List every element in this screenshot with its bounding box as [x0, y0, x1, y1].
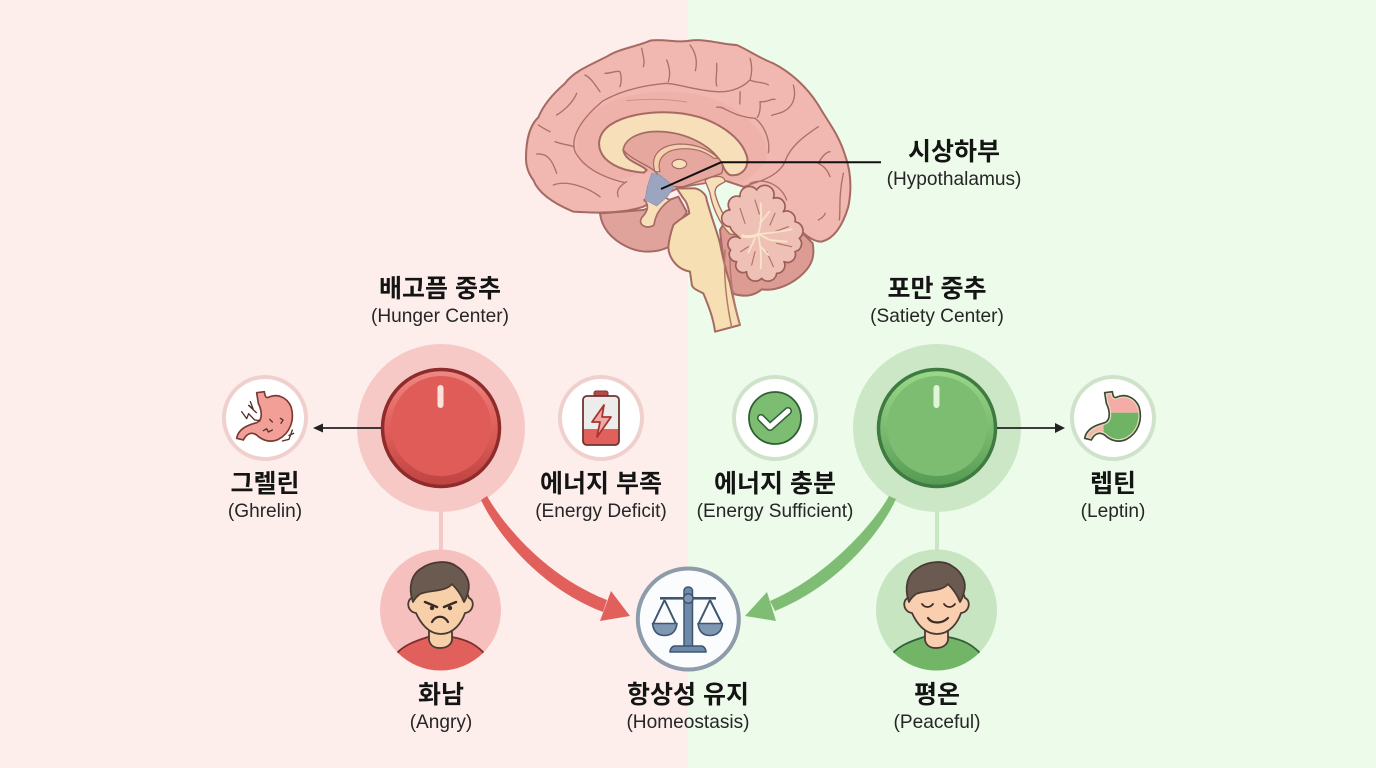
label: peaceful: 평온 — [914, 681, 960, 709]
avatar: peaceful — [876, 550, 997, 680]
background: hunger side — [0, 0, 688, 768]
brainstem — [668, 188, 740, 332]
label: energy deficit — [535, 470, 667, 522]
cerebrum — [526, 40, 851, 242]
label: energy deficit: (Energy Deficit) — [535, 501, 667, 522]
knob body — [382, 370, 500, 486]
label: ghrelin — [228, 470, 302, 522]
halo — [853, 344, 1021, 512]
temporal lobe — [600, 197, 687, 252]
arbor vitae — [743, 234, 758, 237]
heading: satiety center — [870, 275, 1004, 327]
heading: hunger center — [371, 275, 509, 327]
label: homeostasis: 항상성 유지 — [627, 681, 749, 709]
label: energy sufficient — [697, 470, 853, 522]
heading: satiety center: 포만 중추 — [888, 275, 986, 303]
fornix — [654, 144, 718, 172]
sulci — [537, 45, 843, 220]
label: leptin — [1081, 470, 1145, 522]
arrow: satiety to leptin — [997, 423, 1065, 433]
hypothalamus — [645, 173, 674, 206]
heading: hunger center: 배고픔 중추 — [379, 275, 501, 303]
knob face — [887, 376, 987, 476]
halo — [357, 344, 525, 512]
icon: homeostasis balance scale — [638, 568, 739, 670]
label: homeostasis: (Homeostasis) — [626, 712, 750, 733]
knob indicator — [438, 385, 444, 408]
icon: low battery — [560, 377, 642, 459]
heading: satiety center: (Satiety Center) — [870, 306, 1004, 327]
arrow: hunger to ghrelin — [313, 424, 381, 432]
avatar: angry — [380, 550, 501, 680]
pituitary stalk — [641, 193, 670, 227]
curved arrow: hunger to homeostasis — [481, 496, 630, 621]
label: ghrelin: 그렐린 — [230, 470, 300, 498]
label: peaceful: (Peaceful) — [893, 712, 981, 733]
label: ghrelin: (Ghrelin) — [228, 501, 302, 522]
faint gyrus line — [627, 99, 687, 102]
cerebellar folds — [740, 200, 792, 267]
fourth ventricle band — [705, 176, 743, 236]
knob indicator — [934, 385, 940, 408]
icon: energy check — [734, 377, 816, 459]
satiety dial — [853, 344, 1021, 512]
icon: leptin stomach — [1072, 377, 1154, 459]
connector: satiety to peaceful — [935, 505, 939, 555]
knob body — [878, 370, 996, 486]
icon: ghrelin stomach — [224, 377, 306, 459]
corpus callosum — [599, 112, 747, 175]
hunger dial — [357, 344, 525, 512]
curved arrow: satiety to homeostasis — [745, 496, 896, 621]
hypothalamus pointer line — [661, 162, 881, 189]
brainstem lines — [725, 247, 740, 327]
label: energy deficit: 에너지 부족 — [540, 470, 662, 498]
cerebellum base mass — [720, 190, 813, 296]
label: hypothalamus — [887, 138, 1021, 190]
label: energy sufficient: 에너지 충분 — [714, 470, 836, 498]
label: hypothalamus: (Hypothalamus) — [887, 169, 1021, 190]
thalamic nucleus — [672, 159, 687, 169]
cerebellum — [722, 185, 803, 281]
inner gyrus — [576, 92, 767, 187]
label: angry — [410, 681, 472, 733]
connector: hunger to angry — [439, 505, 443, 555]
label: leptin: (Leptin) — [1081, 501, 1145, 522]
label: homeostasis — [626, 681, 750, 733]
label: peaceful — [893, 681, 981, 733]
label: energy sufficient: (Energy Sufficient) — [697, 501, 853, 522]
heading: hunger center: (Hunger Center) — [371, 306, 509, 327]
label: angry: 화남 — [418, 681, 464, 709]
thalamus — [623, 132, 723, 187]
knob face — [391, 376, 491, 476]
background: satiety side — [688, 0, 1376, 768]
brain illustration — [526, 40, 851, 332]
label: angry: (Angry) — [410, 712, 472, 733]
label: hypothalamus: 시상하부 — [908, 138, 1000, 166]
label: leptin: 렙틴 — [1090, 470, 1136, 498]
